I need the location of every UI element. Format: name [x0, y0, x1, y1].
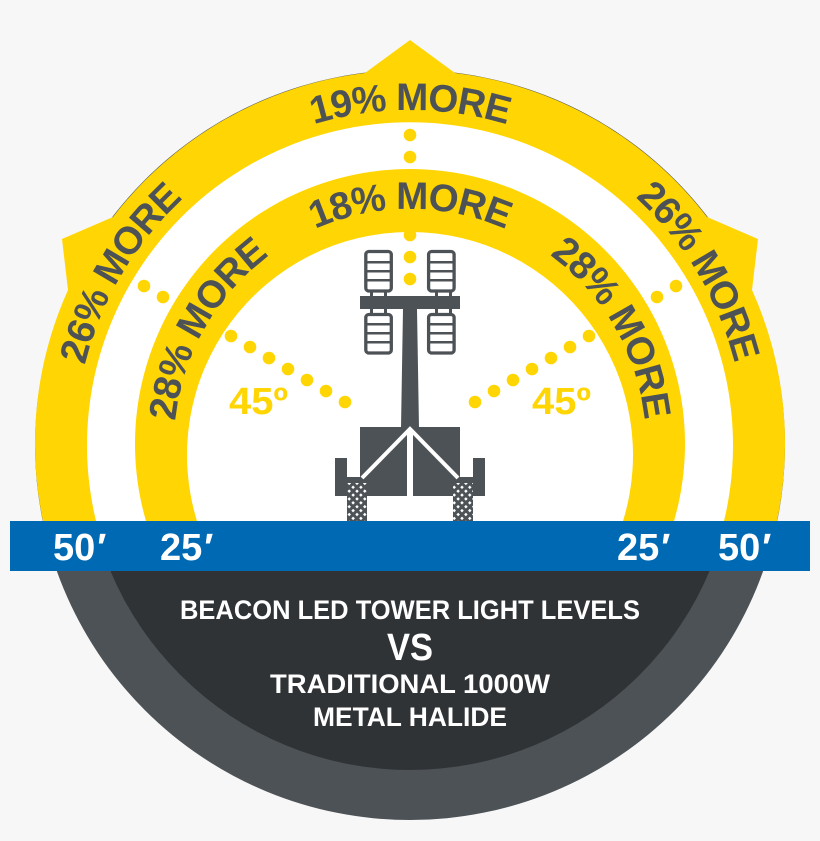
comparison caption — [180, 595, 640, 732]
label: outer right 26% more: 26% MORE — [636, 182, 760, 362]
comparison caption: BEACON LED TOWER LIGHT LEVELS — [180, 595, 640, 625]
label: outer top 19% more: 19% MORE — [310, 84, 512, 124]
inner white area — [187, 232, 633, 521]
label: outer left 26% more: 26% MORE — [61, 181, 182, 364]
label: inner right 28% more: 28% MORE — [550, 238, 671, 419]
inner yellow arc — [135, 169, 685, 521]
label: 50 feet left: 50′ — [53, 527, 106, 569]
icon: light tower — [335, 252, 485, 521]
label: 25 feet left: 25′ — [160, 527, 213, 569]
dotted lines — [138, 129, 682, 408]
comparison caption: METAL HALIDE — [313, 702, 507, 732]
label: inner left 28% more: 28% MORE — [150, 236, 268, 420]
label: inner top 18% more: 18% MORE — [309, 182, 514, 228]
outer yellow arc with three points — [35, 40, 785, 521]
label: 45 degrees left: 45º — [229, 381, 288, 423]
label: 50 feet right: 50′ — [718, 527, 771, 569]
comparison caption: TRADITIONAL 1000W — [270, 669, 551, 699]
label: 25 feet right: 25′ — [617, 527, 670, 569]
label: 45 degrees right: 45º — [532, 381, 591, 423]
comparison caption: VS — [387, 627, 433, 669]
blue distance band — [10, 521, 810, 571]
